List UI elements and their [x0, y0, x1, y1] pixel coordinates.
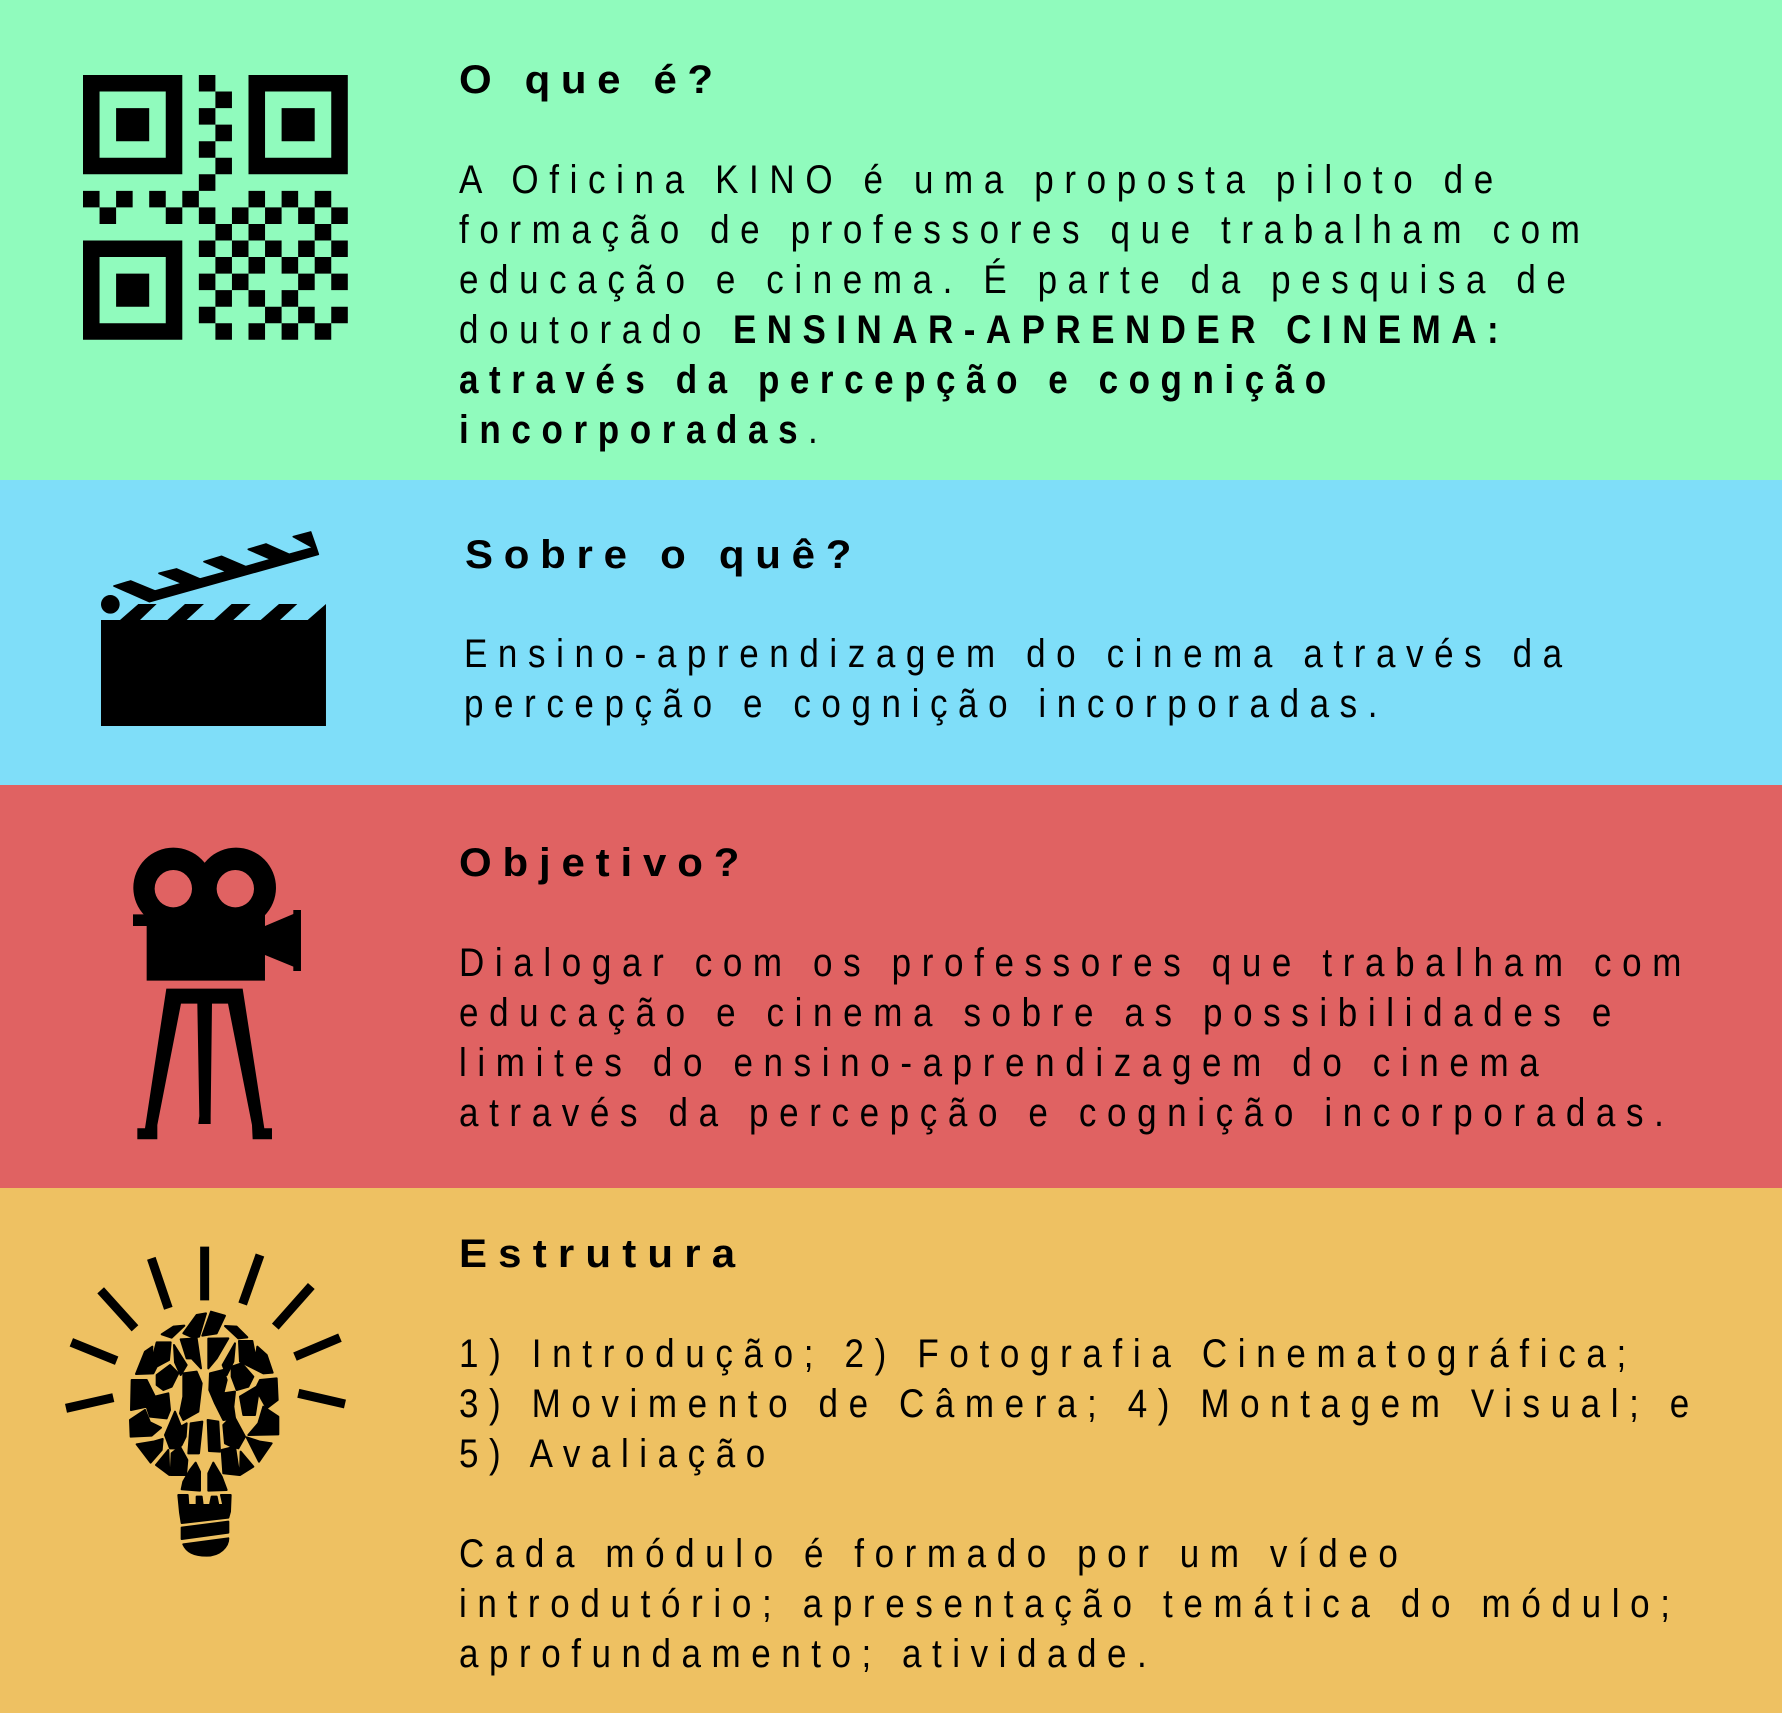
rays of light — [66, 1247, 345, 1408]
text: modules: 1) Introdução; 2) Fotografia Cinematográfica; — [459, 1331, 1626, 1376]
text: description: através da percepção e cognição — [459, 357, 1326, 402]
text: description: formação de professores que trabalham com — [459, 207, 1580, 252]
text: objective: educação e cinema sobre as possibilidades e — [459, 990, 1611, 1035]
text: modules: 5) Avaliação — [459, 1431, 765, 1476]
text: module format: Cada módulo é formado por um vídeo — [459, 1531, 1398, 1576]
heading: Estrutura: Estrutura — [459, 1231, 736, 1276]
brain bulb — [130, 1312, 278, 1556]
text: modules — [459, 1331, 1689, 1476]
text: topic: percepção e cognição incorporadas. — [464, 681, 1377, 726]
text: modules: 3) Movimento de Câmera; 4) Montagem Visual; e — [459, 1381, 1689, 1426]
heading: Sobre o quê?: Sobre o quê? — [465, 532, 851, 577]
icon: film camera on tripod — [133, 848, 301, 1139]
icon: QR code — [83, 75, 348, 340]
text: description: incorporadas — [459, 407, 798, 452]
text: description: ENSINAR-APRENDER CINEMA: — [733, 307, 1499, 352]
text: module format: introdutório; apresentação temática do módulo; — [459, 1581, 1670, 1626]
icon: light bulb with brain — [66, 1247, 345, 1556]
panel: O que é? — [0, 0, 1782, 480]
text: topic: Ensino-aprendizagem do cinema através da — [464, 631, 1562, 676]
text: description: doutorado — [459, 307, 701, 352]
text: description: . — [808, 407, 818, 452]
heading: O que é?: O que é? — [459, 57, 713, 102]
panel: Estrutura — [0, 1188, 1782, 1713]
icon: clapperboard — [101, 532, 326, 726]
heading: Objetivo?: Objetivo? — [459, 840, 739, 885]
text: description: A Oficina KINO é uma proposta piloto de — [459, 157, 1493, 202]
text: objective — [459, 940, 1681, 1135]
panel: Objetivo? — [0, 785, 1782, 1188]
text: objective: através da percepção e cognição incorporadas. — [459, 1090, 1664, 1135]
text: description — [459, 157, 1580, 452]
text: module format: aprofundamento; atividade. — [459, 1631, 1147, 1676]
text: module format — [459, 1531, 1670, 1676]
text: objective: limites do ensino-aprendizagem do cinema — [459, 1040, 1539, 1085]
panel: Sobre o quê? — [0, 480, 1782, 785]
text: description: educação e cinema. É parte da pesquisa de — [459, 257, 1566, 302]
text: objective: Dialogar com os professores que trabalham com — [459, 940, 1681, 985]
text: topic — [464, 631, 1562, 726]
